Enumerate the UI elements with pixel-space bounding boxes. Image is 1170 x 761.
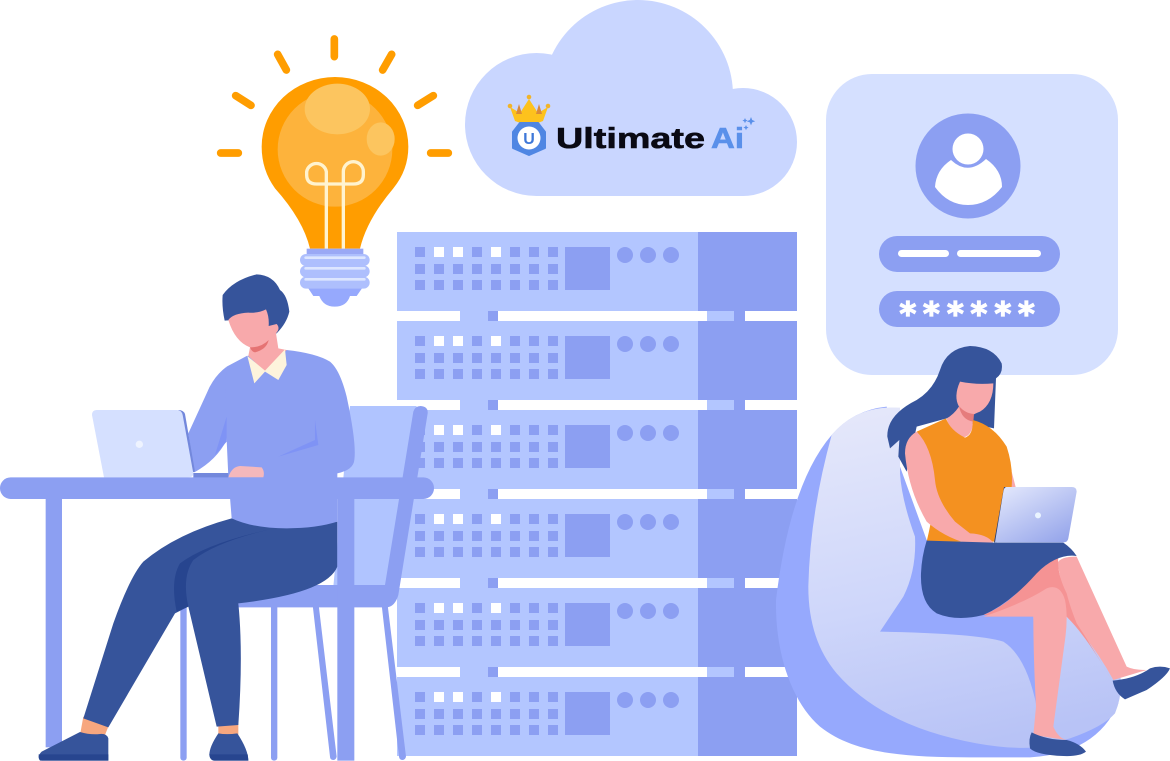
laptop	[92, 410, 230, 478]
shirt collar	[247, 349, 287, 383]
server unit 5	[397, 588, 797, 667]
table	[0, 477, 434, 761]
chair	[180, 406, 428, 761]
hand	[228, 466, 264, 477]
password field: ******	[900, 295, 1035, 333]
logo: shield	[513, 123, 545, 155]
hair	[222, 274, 289, 333]
shoe lower	[1029, 732, 1086, 756]
face and neck	[947, 382, 993, 437]
password field	[879, 291, 1060, 333]
server rack	[397, 232, 797, 756]
skirt	[921, 541, 1077, 618]
orange top	[917, 418, 1012, 542]
filament	[307, 162, 363, 249]
shoe raised	[1113, 667, 1170, 699]
bean bag	[776, 407, 1121, 757]
face and neck	[228, 309, 287, 372]
back leg	[1057, 557, 1147, 680]
far arm	[1008, 472, 1016, 488]
server unit 4	[397, 499, 797, 578]
bulb base	[300, 249, 370, 307]
cloud shape	[465, 0, 797, 196]
login card	[826, 74, 1118, 375]
shoe right	[209, 733, 248, 761]
sweater	[215, 350, 355, 528]
avatar	[916, 114, 1020, 218]
server unit 1	[397, 232, 797, 311]
logo: sparkles	[742, 117, 755, 130]
logo: shield: U	[523, 131, 535, 148]
woman in bean bag	[776, 346, 1170, 757]
cloud with logo: Ai	[711, 123, 744, 155]
inner glow	[278, 92, 392, 207]
arm	[905, 432, 993, 543]
leg and trousers	[80, 518, 337, 735]
highlight small	[367, 122, 395, 156]
highlight large	[305, 84, 370, 134]
man at desk	[0, 274, 434, 761]
card panel	[826, 74, 1118, 375]
cloud with logo	[465, 0, 797, 196]
front leg	[983, 587, 1067, 740]
light bulb	[221, 39, 448, 307]
leg shadow	[983, 557, 1112, 680]
logo: crown	[508, 95, 550, 124]
server unit 3	[397, 410, 797, 489]
sweater back arm	[188, 367, 227, 472]
server unit 2	[397, 321, 797, 400]
username field	[879, 236, 1060, 272]
logo: wordmark: Ultimate	[556, 123, 705, 155]
shoe left	[39, 732, 108, 761]
server unit 6	[397, 677, 797, 756]
laptop	[994, 487, 1077, 542]
rays	[221, 39, 448, 153]
glass	[262, 77, 408, 249]
hair	[887, 346, 1002, 472]
